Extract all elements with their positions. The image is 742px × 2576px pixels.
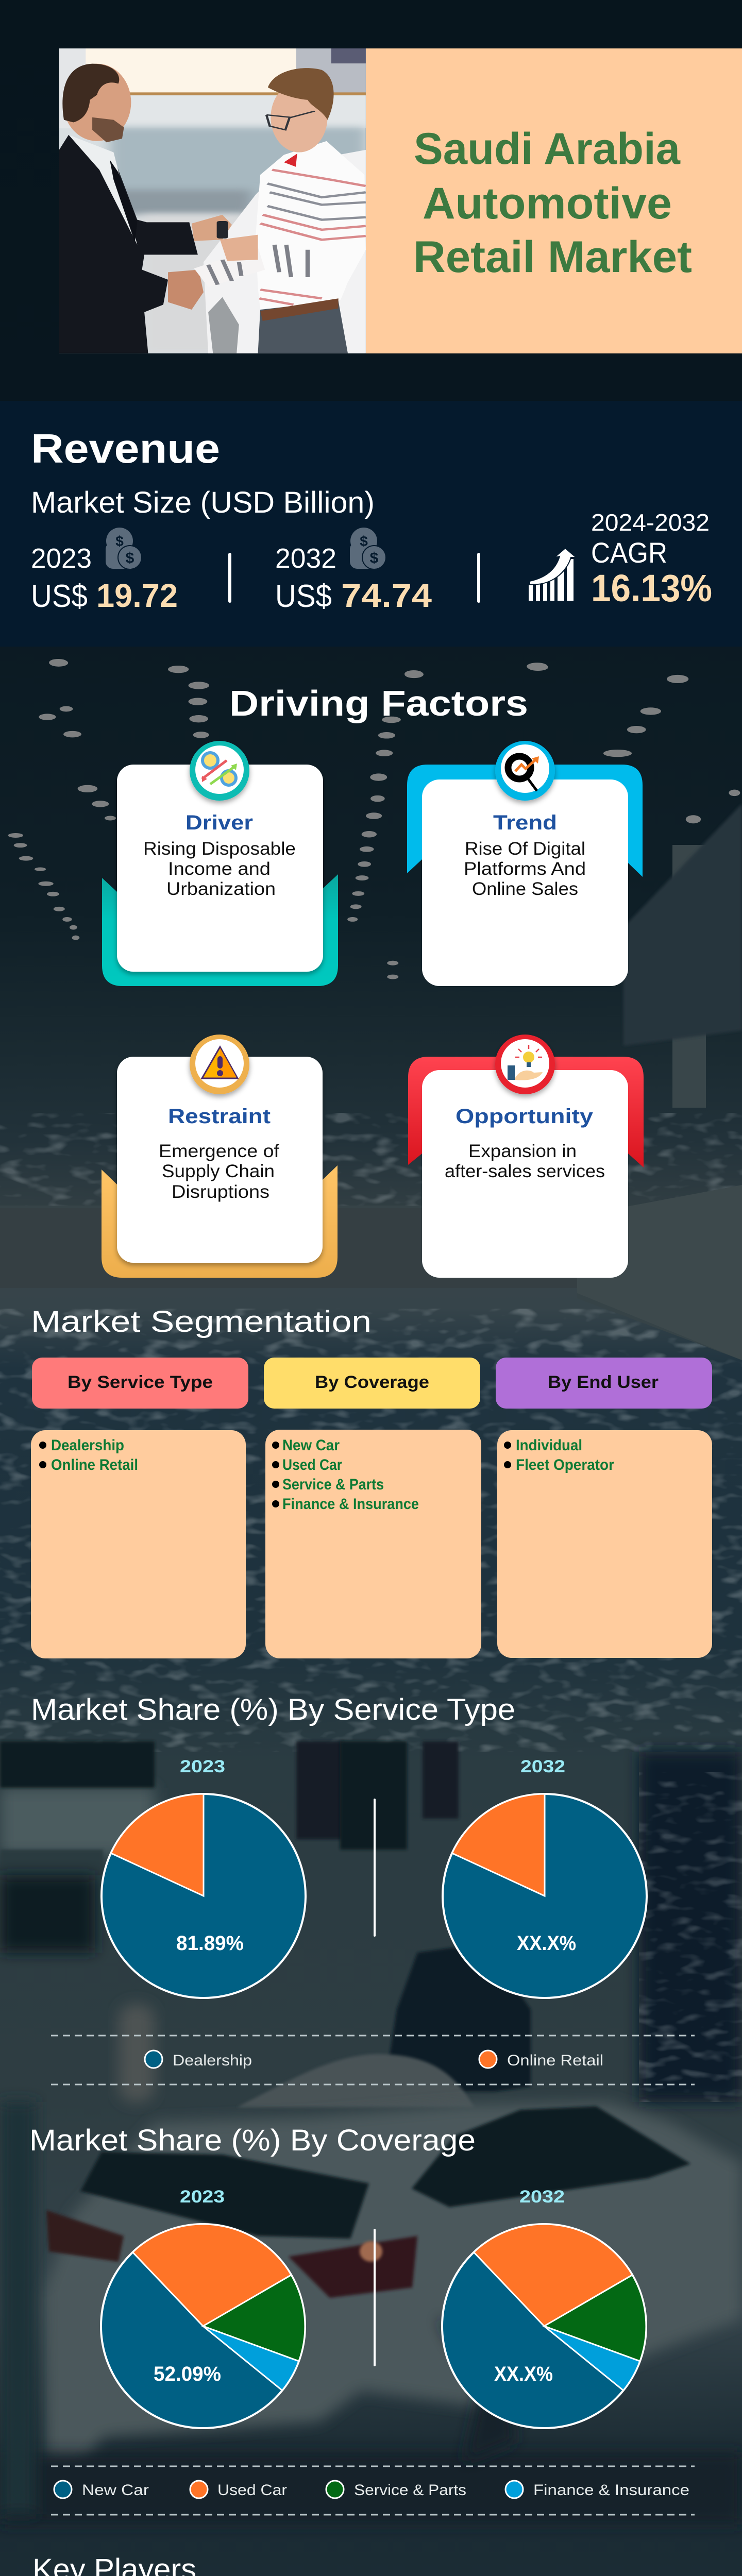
2023 value: 19.72 — [96, 577, 178, 614]
pie chart: service type 2032: 2032 — [520, 1757, 565, 1776]
title: Automotive — [423, 179, 672, 228]
revenue heading: Revenue — [31, 426, 220, 471]
opportunity description — [445, 1141, 605, 1181]
pie chart: service type 2032: XX.X% — [517, 1932, 576, 1955]
segment list: coverage: Finance & Insurance — [282, 1496, 419, 1513]
CAGR block — [591, 509, 712, 609]
pie chart: service type 2032 — [443, 1757, 647, 1998]
heading: driving factors: Driving Factors — [229, 683, 528, 723]
2032 value: 2032 — [275, 543, 336, 574]
legend: coverage — [54, 2481, 689, 2499]
icon: growth arrow and bars — [529, 548, 576, 601]
restraint title: Restraint — [168, 1105, 271, 1128]
pie chart: service type 2023 — [102, 1757, 306, 1998]
2023 value: US$ — [31, 579, 88, 614]
driver description: Urbanization — [166, 879, 276, 899]
driver title: Driver — [185, 811, 253, 834]
heading: market share by service type: Market Share (%) By Service Type — [31, 1693, 515, 1726]
restraint description: Emergence of — [159, 1141, 279, 1161]
2023 value: 2023 — [31, 543, 92, 574]
icon: coins 2032: $ — [370, 550, 379, 567]
CAGR block: CAGR — [591, 536, 667, 569]
segment list: coverage: Service & Parts — [282, 1476, 384, 1493]
segment header: by service type — [32, 1358, 248, 1409]
title: Saudi Arabia — [414, 124, 681, 174]
CAGR block: 16.13% — [591, 567, 712, 609]
CAGR block: 2024-2032 — [591, 509, 710, 536]
2032 value: US$ — [275, 579, 332, 614]
opportunity title: Opportunity — [456, 1105, 594, 1128]
driver description: Income and — [168, 859, 271, 879]
icon: coins 2023: $ — [115, 533, 124, 549]
2032 value — [275, 543, 432, 614]
driver description: Rising Disposable — [143, 839, 296, 859]
hero photo: salesman handing keys to customer — [59, 48, 366, 353]
segment list: service type: Online Retail — [51, 1456, 138, 1473]
icon: coins 2023 — [106, 528, 142, 569]
icon: coins 2032 — [350, 528, 386, 569]
panel: opportunity — [408, 1035, 644, 1278]
heading: market share by coverage: Market Share (%) By Coverage — [29, 2124, 476, 2157]
segment list: end user: Individual — [516, 1437, 582, 1454]
driver description — [143, 839, 296, 899]
segment list: coverage: Used Car — [282, 1456, 342, 1473]
market size label: Market Size (USD Billion) — [31, 486, 375, 519]
cars and people layer — [0, 1741, 742, 2524]
pie chart: coverage 2023 — [101, 2187, 305, 2428]
icon: driver gears and arrows — [190, 741, 249, 801]
pie chart: coverage 2032: 2032 — [519, 2187, 565, 2207]
segment header: by service type: By Service Type — [68, 1372, 213, 1392]
trend description — [464, 839, 586, 899]
title: Retail Market — [413, 232, 692, 282]
title — [413, 124, 692, 282]
icon: coins 2032: $ — [360, 533, 368, 549]
restraint description: Disruptions — [172, 1182, 269, 1202]
segment header: by end user: By End User — [548, 1372, 659, 1392]
segment header: by coverage: By Coverage — [315, 1372, 429, 1392]
restraint description: Supply Chain — [162, 1161, 275, 1181]
trend description: Platforms And — [464, 859, 586, 879]
legend: service type: Online Retail — [507, 2052, 603, 2069]
title panel — [366, 48, 742, 353]
segment list: end user — [497, 1430, 712, 1658]
icon: warning triangle — [190, 1035, 249, 1094]
legend: coverage: New Car — [82, 2482, 149, 2499]
legend: service type — [145, 2050, 603, 2069]
segment list: service type: Dealership — [51, 1437, 124, 1454]
panel: restraint — [102, 1035, 338, 1278]
trend description: Rise Of Digital — [465, 839, 585, 859]
ceiling lights — [8, 659, 740, 979]
restraint description — [159, 1141, 279, 1202]
pie chart: coverage 2032: XX.X% — [494, 2363, 553, 2385]
legend: coverage: Service & Parts — [354, 2482, 466, 2499]
icon: bulb on hand — [495, 1035, 555, 1094]
pie chart: coverage 2023: 52.09% — [154, 2363, 221, 2385]
icon: trend magnifier — [495, 741, 555, 801]
opportunity description: Expansion in — [468, 1141, 577, 1161]
segment list: coverage: New Car — [282, 1437, 340, 1454]
legend: coverage: Finance & Insurance — [533, 2482, 689, 2499]
lights above band gap — [49, 659, 548, 677]
trend description: Online Sales — [472, 879, 578, 899]
pie chart: coverage 2023: 2023 — [180, 2187, 225, 2207]
segment header: by coverage — [264, 1358, 480, 1409]
opportunity description: after-sales services — [445, 1161, 605, 1181]
2023 value — [31, 543, 178, 614]
2032 value: 74.74 — [341, 577, 432, 614]
segment list: end user: Fleet Operator — [516, 1456, 614, 1473]
pie chart: service type 2023: 2023 — [180, 1757, 225, 1776]
revenue band — [0, 401, 742, 647]
white car — [44, 2102, 742, 2514]
panel: driver — [102, 741, 338, 986]
segment list: coverage — [265, 1430, 481, 1658]
legend: coverage: Used Car — [217, 2482, 287, 2499]
segment header: by end user — [496, 1358, 712, 1409]
panel: trend — [407, 741, 643, 986]
heading: market segmentation: Market Segmentation — [31, 1305, 372, 1338]
legend: service type: Dealership — [173, 2052, 252, 2069]
segment list: service type — [31, 1430, 246, 1658]
icon: coins 2023: $ — [126, 550, 134, 567]
trend title: Trend — [493, 811, 557, 834]
hero banner — [59, 48, 742, 353]
pie chart: service type 2023: 81.89% — [176, 1932, 244, 1955]
pie chart: coverage 2032 — [442, 2187, 646, 2428]
